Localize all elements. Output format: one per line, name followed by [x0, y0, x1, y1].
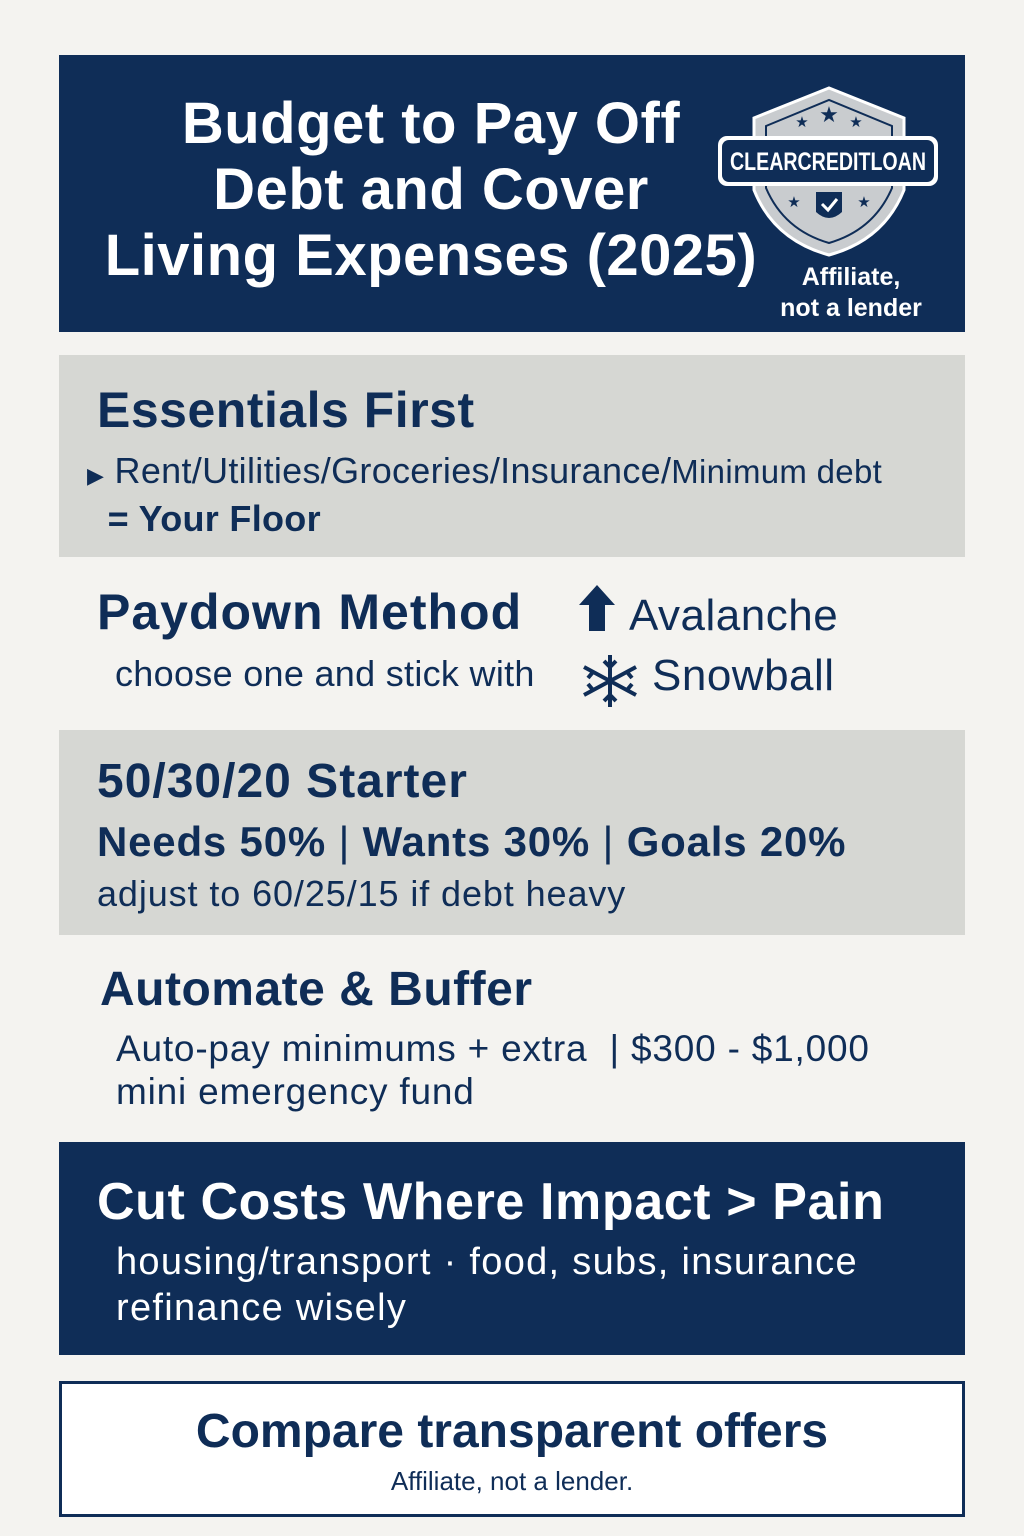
- panel: 50/30/20: [59, 730, 965, 935]
- badge: ClearCreditLoan: not a lender: [780, 294, 922, 322]
- badge: ClearCreditLoan: ★: [795, 114, 809, 131]
- panel: paydown method: [97, 584, 838, 707]
- text block: ▶ Rent/Utilities/Groceries/Insurance/Minimum debt: [87, 450, 882, 491]
- panel: automate & buffer: [100, 963, 870, 1112]
- badge: ClearCreditLoan: ★: [819, 102, 839, 127]
- title: Debt and Cover: [213, 157, 649, 222]
- text block: Auto-pay minimums + extra | $300 - $1,000: [116, 1028, 870, 1069]
- icon: snowflake: [583, 655, 637, 707]
- disclaimer: Affiliate, not a lender.: [391, 1466, 633, 1496]
- badge: ClearCreditLoan: ★: [857, 194, 871, 211]
- panel: cut costs: [59, 1142, 965, 1355]
- heading: Compare transparent offers: [196, 1405, 828, 1458]
- header panel: [59, 55, 965, 332]
- text block: refinance wisely: [116, 1287, 407, 1329]
- heading: Paydown Method: [97, 584, 522, 640]
- icon: arrow up: [579, 585, 615, 631]
- badge: ClearCreditLoan: ★: [849, 114, 863, 131]
- badge: ClearCreditLoan: Affiliate,: [802, 263, 900, 291]
- title: Budget to Pay Off: [182, 91, 680, 156]
- text block: [87, 450, 882, 539]
- title: Living Expenses (2025): [105, 223, 757, 288]
- text block: choose one and stick with: [115, 653, 535, 694]
- label: snowball: Snowball: [652, 651, 835, 700]
- heading: Automate & Buffer: [100, 963, 533, 1016]
- text block: = Your Floor: [108, 498, 321, 539]
- split line: Needs 50% | Wants 30% | Goals 20%: [97, 818, 846, 865]
- note: adjust to 60/25/15 if debt heavy: [97, 873, 626, 914]
- label: avalanche: Avalanche: [629, 591, 838, 640]
- text block: [116, 1028, 870, 1112]
- text block: housing/transport · food, subs, insurance: [116, 1241, 858, 1283]
- text block: mini emergency fund: [116, 1071, 475, 1112]
- panel: essentials first: [59, 355, 965, 557]
- badge: ClearCreditLoan: [718, 86, 938, 322]
- text block: [116, 1241, 858, 1329]
- heading: Cut Costs Where Impact > Pain: [97, 1173, 884, 1231]
- badge: ClearCreditLoan: ★: [787, 194, 801, 211]
- heading: Essentials First: [97, 382, 475, 438]
- panel: CTA: [59, 1381, 965, 1517]
- heading: 50/30/20 Starter: [97, 755, 468, 808]
- title: [105, 91, 757, 288]
